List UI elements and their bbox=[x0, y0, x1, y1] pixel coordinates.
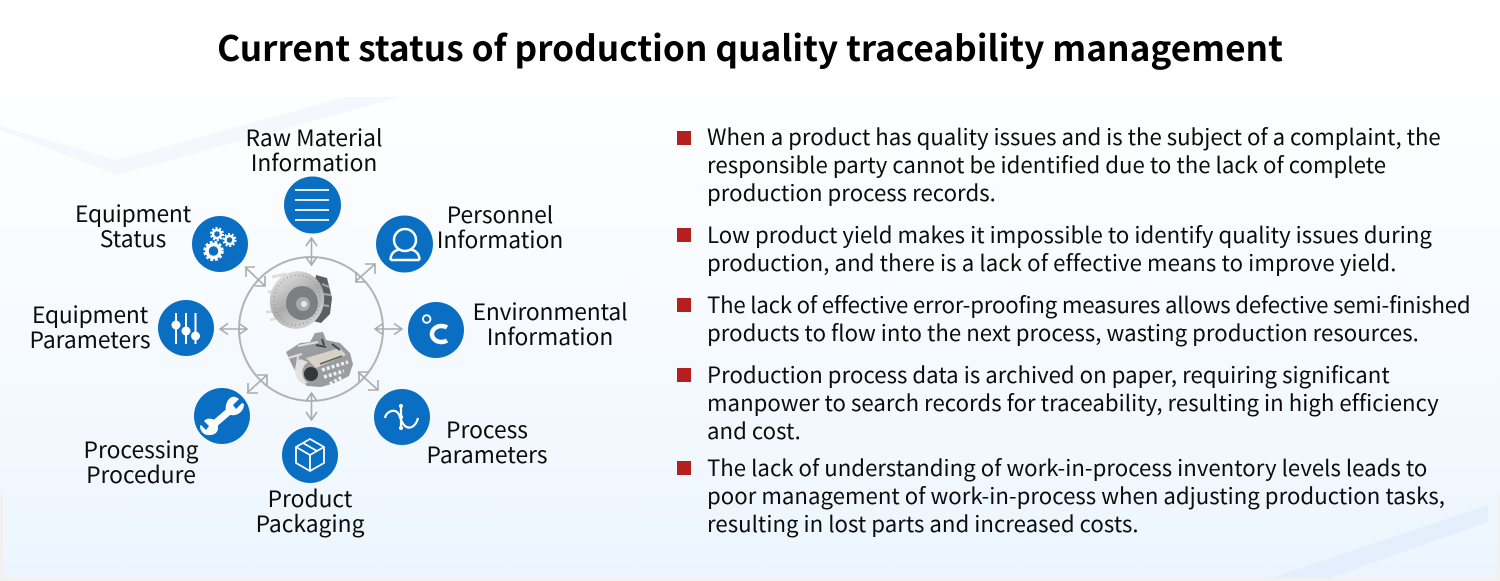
text block 4: manpower to search records for traceability, resulting in high efficiency bbox=[707, 386, 1439, 418]
icon: person bbox=[376, 216, 433, 272]
text block 5: The lack of understanding of work-in-process inventory levels leads to bbox=[707, 451, 1427, 483]
icon: temperature bbox=[408, 302, 464, 358]
label: environmental: Information bbox=[487, 318, 613, 352]
title: Current status of production quality traceability management bbox=[217, 21, 1283, 72]
label: processing: Processing bbox=[84, 432, 198, 465]
text block 3: The lack of effective error-proofing measures allows defective semi-finished bbox=[707, 288, 1470, 320]
label: process parameters: Parameters bbox=[426, 436, 548, 470]
label: personnel: Personnel bbox=[447, 197, 553, 230]
label: raw material: Raw Material bbox=[246, 120, 382, 153]
label: product packaging: Packaging bbox=[256, 506, 364, 538]
photo: brake disc bbox=[263, 265, 332, 335]
text block 4: Production process data is archived on paper, requiring significant bbox=[707, 358, 1390, 390]
label: equipment status: Status bbox=[100, 220, 166, 254]
icon: gears bbox=[192, 216, 248, 272]
label: equipment status bbox=[75, 196, 191, 254]
icon: box bbox=[282, 427, 338, 483]
label: processing bbox=[84, 432, 198, 490]
bullet 5 bbox=[677, 461, 691, 475]
text block 2 bbox=[707, 218, 1432, 278]
label: equipment parameters bbox=[29, 297, 151, 354]
label: environmental bbox=[473, 294, 627, 352]
bullet 1 bbox=[677, 131, 691, 145]
text block 4: and cost. bbox=[707, 414, 801, 446]
label: personnel bbox=[437, 197, 563, 254]
text block 3: products to flow into the next process, wasting production resources. bbox=[707, 316, 1419, 348]
text block 1: When a product has quality issues and is the subject of a complaint, the bbox=[707, 120, 1441, 152]
bullet 2 bbox=[677, 228, 691, 242]
label: processing: Procedure bbox=[86, 456, 196, 490]
label: environmental: Environmental bbox=[473, 294, 627, 327]
label: equipment parameters: Parameters bbox=[29, 322, 151, 354]
text block 4 bbox=[707, 358, 1439, 446]
icon: wrench bbox=[194, 388, 250, 444]
label: raw material bbox=[246, 120, 382, 178]
text block 1: responsible party cannot be identified due to the lack of complete bbox=[707, 148, 1386, 180]
text block 1 bbox=[707, 120, 1441, 208]
label: process parameters: Process bbox=[446, 412, 528, 445]
icon: process curve bbox=[374, 389, 430, 445]
arrows bbox=[220, 238, 402, 420]
bullet 4 bbox=[677, 368, 691, 382]
icon: sliders bbox=[158, 300, 214, 356]
label: raw material: Information bbox=[251, 144, 377, 178]
text block 5 bbox=[707, 451, 1445, 539]
label: product packaging bbox=[256, 481, 364, 538]
text block 5: poor management of work-in-process when adjusting production tasks, bbox=[707, 479, 1445, 511]
text block 2: Low product yield makes it impossible to identify quality issues during bbox=[707, 218, 1432, 250]
ring bbox=[239, 257, 383, 401]
label: equipment parameters: Equipment bbox=[32, 297, 148, 330]
photo: gearbox bbox=[286, 332, 353, 387]
text block 2: production, and there is a lack of effective means to improve yield. bbox=[707, 246, 1397, 278]
icon: raw material lines bbox=[284, 176, 341, 234]
label: product packaging: Product bbox=[268, 481, 352, 514]
text block 5: resulting in lost parts and increased costs. bbox=[707, 507, 1139, 539]
label: process parameters bbox=[426, 412, 548, 470]
text block 1: production process records. bbox=[707, 176, 996, 208]
bullet 3 bbox=[677, 298, 691, 312]
text block 3 bbox=[707, 288, 1470, 348]
label: personnel: Information bbox=[437, 222, 563, 254]
label: equipment status: Equipment bbox=[75, 196, 191, 229]
